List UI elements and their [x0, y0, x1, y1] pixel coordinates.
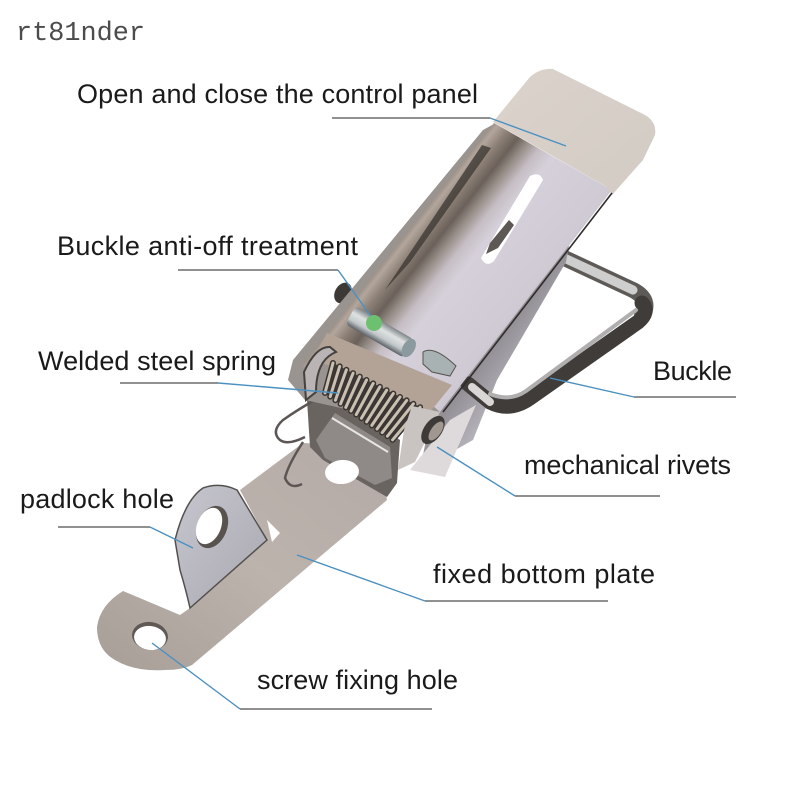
buckle wire lower run [468, 303, 645, 406]
callout: control panel [77, 79, 566, 146]
channel floor [312, 333, 452, 412]
left spring bracket [304, 347, 336, 400]
fixed bottom plate [97, 400, 400, 670]
callout: padlock hole: padlock hole [20, 484, 174, 514]
base bracket [307, 400, 400, 497]
callout: control panel: Open and close the control panel [77, 79, 478, 109]
latch illustration [97, 69, 655, 670]
dark rim bump [331, 279, 355, 307]
callout: mechanical rivets: mechanical rivets [524, 450, 731, 480]
callout: anti-off treatment [57, 231, 382, 331]
callout: screw hole [152, 643, 458, 709]
screw fixing hole [130, 620, 170, 652]
buckle wire upper run [560, 256, 645, 316]
grip tab [493, 69, 655, 195]
dark channel streak [385, 145, 491, 290]
pale lower side [410, 405, 476, 477]
callout: padlock hole [20, 484, 193, 548]
right plate edge [443, 193, 612, 412]
callout: mechanical rivets [437, 447, 731, 496]
callout: anti-off treatment: Buckle anti-off treatment [57, 231, 358, 261]
pin cylinder [345, 306, 419, 361]
right frame edge [398, 406, 440, 470]
slot [481, 174, 543, 264]
callout: steel spring: Welded steel spring [38, 346, 276, 376]
callout: steel spring [38, 346, 338, 393]
spring [325, 363, 420, 440]
padlock lug [175, 485, 267, 608]
callout: buckle [550, 356, 736, 397]
upper mounting hole [324, 459, 360, 485]
rivet [416, 412, 450, 448]
callout: bottom plate: fixed bottom plate [433, 559, 655, 589]
watermark: rt81nder [16, 19, 145, 49]
second pin [423, 350, 456, 376]
callout: screw hole: screw fixing hole [257, 665, 458, 695]
control panel plate [300, 69, 655, 412]
triangular cutout [267, 520, 280, 542]
callout: bottom plate [297, 555, 655, 601]
callout: buckle: Buckle [653, 356, 732, 386]
left rim and lower frame [288, 124, 494, 420]
spring hook wire [276, 396, 322, 486]
underside of plate [420, 240, 570, 470]
